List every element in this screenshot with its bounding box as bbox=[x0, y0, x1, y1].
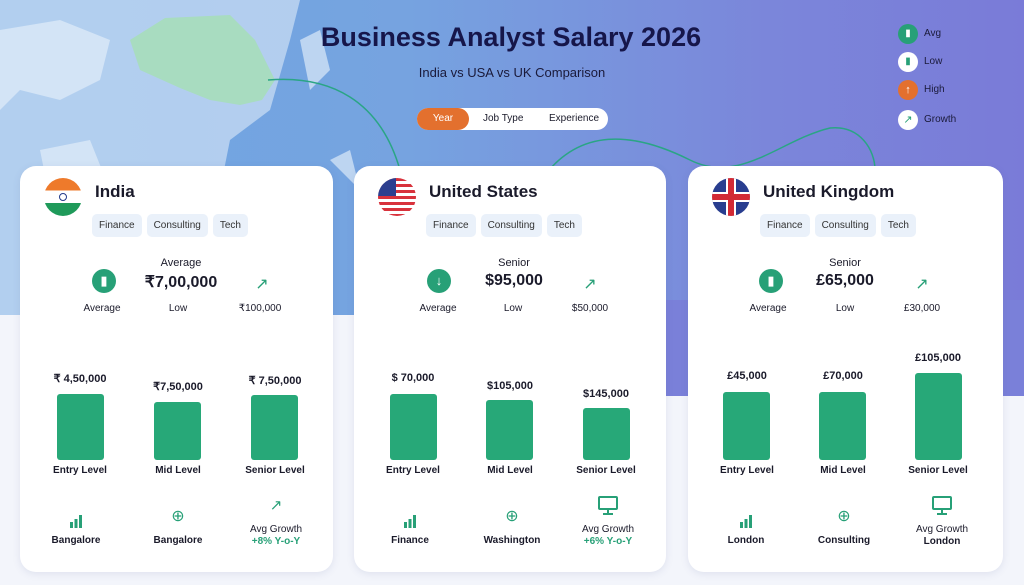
panel: United States: Average bbox=[419, 303, 457, 314]
panel: United Kingdom: Finance bbox=[767, 220, 803, 231]
panel: United States: Senior bbox=[498, 257, 530, 269]
icon: India flag bbox=[44, 178, 82, 216]
legend: ▮ bbox=[905, 28, 911, 39]
panel: India: Low bbox=[169, 303, 187, 314]
bar chart bbox=[386, 372, 636, 476]
panel: United States: Washington bbox=[484, 535, 540, 546]
panel: India: ⊕ bbox=[171, 508, 185, 525]
panel: United Kingdom: ▮ bbox=[767, 273, 775, 288]
tabs: Experience bbox=[549, 113, 599, 124]
panel: India: Bangalore bbox=[154, 535, 202, 546]
icon: bars bbox=[404, 515, 416, 528]
bar chart: ₹ 7,50,000 bbox=[249, 375, 301, 387]
panel: India: ₹100,000 bbox=[239, 303, 281, 314]
bar chart: Mid Level bbox=[820, 465, 866, 476]
bar chart: Senior Level bbox=[908, 465, 968, 476]
panel: India: Avg Growth bbox=[250, 524, 302, 535]
icon: monitor bbox=[932, 496, 952, 515]
bar chart: $105,000 bbox=[487, 380, 533, 392]
legend: ▮ bbox=[905, 56, 911, 67]
panel: India: Average bbox=[83, 303, 121, 314]
bar chart: Entry Level bbox=[386, 465, 440, 476]
panel: United States: ⊕ bbox=[505, 508, 519, 525]
panel: United Kingdom: Senior bbox=[829, 257, 861, 269]
panel: United Kingdom: London bbox=[728, 535, 764, 546]
bar chart: $145,000 bbox=[583, 388, 629, 400]
bar chart: Mid Level bbox=[155, 465, 201, 476]
connecting curve bbox=[552, 127, 876, 166]
panel: United States bbox=[354, 166, 666, 572]
panel: India: ▮ bbox=[100, 273, 108, 288]
legend bbox=[898, 24, 956, 130]
panel: United Kingdom: Tech bbox=[888, 220, 909, 231]
bar chart: Entry Level bbox=[53, 465, 107, 476]
panel: India: ↗ bbox=[255, 276, 269, 293]
panel: United States: $50,000 bbox=[572, 303, 608, 314]
panel: United Kingdom: £65,000 bbox=[816, 272, 874, 289]
legend: ↗ bbox=[903, 114, 913, 126]
panel: United Kingdom: Consulting bbox=[822, 220, 869, 231]
panel: United States: ↓ bbox=[436, 273, 442, 288]
panel: India: +8% Y-o-Y bbox=[252, 536, 300, 547]
icon: UK flag bbox=[712, 178, 750, 216]
bar chart: ₹ 4,50,000 bbox=[54, 373, 106, 385]
icon: US flag bbox=[378, 178, 416, 216]
panel: United States: $95,000 bbox=[485, 272, 543, 289]
panel: India: Average bbox=[161, 257, 201, 269]
panel: United States: Avg Growth bbox=[582, 524, 634, 535]
panel: India: Consulting bbox=[154, 220, 201, 231]
panel: United Kingdom: Average bbox=[749, 303, 787, 314]
panel: United Kingdom bbox=[688, 166, 1003, 572]
panel: United States: Finance bbox=[391, 535, 429, 546]
panel: United States: Consulting bbox=[488, 220, 535, 231]
bar chart: £70,000 bbox=[823, 370, 863, 382]
panel: United Kingdom: Avg Growth bbox=[916, 524, 968, 535]
bar chart: £105,000 bbox=[915, 352, 961, 364]
panel: United States: +6% Y-o-Y bbox=[584, 536, 632, 547]
bar chart: Senior Level bbox=[576, 465, 636, 476]
icon: bars bbox=[740, 515, 752, 528]
panel: United States: Finance bbox=[433, 220, 469, 231]
legend: High bbox=[924, 84, 945, 95]
panel: United Kingdom: London bbox=[924, 536, 960, 547]
panel: India: Tech bbox=[220, 220, 241, 231]
panel: India: Finance bbox=[99, 220, 135, 231]
icon: monitor bbox=[598, 496, 618, 515]
tabs: Year bbox=[433, 113, 453, 124]
panel: United States: Tech bbox=[554, 220, 575, 231]
panel: United Kingdom: Low bbox=[836, 303, 854, 314]
icon: bars bbox=[70, 515, 82, 528]
tabs bbox=[417, 108, 608, 130]
map background bbox=[0, 0, 400, 315]
panel: India bbox=[20, 166, 333, 572]
panel: India: Bangalore bbox=[52, 535, 100, 546]
legend: Growth bbox=[924, 114, 956, 125]
panel: United States: United States bbox=[429, 182, 538, 201]
panel: United Kingdom: ⊕ bbox=[837, 508, 851, 525]
panel: United Kingdom: ↗ bbox=[915, 276, 929, 293]
tabs: Job Type bbox=[483, 113, 523, 124]
bar chart: Entry Level bbox=[720, 465, 774, 476]
subtitle: India vs USA vs UK Comparison bbox=[419, 65, 605, 80]
panel: India: India bbox=[95, 182, 135, 201]
bar chart: ₹7,50,000 bbox=[153, 381, 203, 393]
bar chart bbox=[53, 373, 305, 476]
panel: United Kingdom: Consulting bbox=[818, 535, 870, 546]
bar chart: Senior Level bbox=[245, 465, 305, 476]
legend: Avg bbox=[924, 28, 941, 39]
panel: India: ↗ bbox=[270, 497, 282, 514]
bar chart: £45,000 bbox=[727, 370, 767, 382]
panel: United States: Low bbox=[504, 303, 522, 314]
bar chart: $ 70,000 bbox=[392, 372, 434, 384]
panel: United Kingdom: £30,000 bbox=[904, 303, 940, 314]
panel: United Kingdom: United Kingdom bbox=[763, 182, 894, 201]
panel: India: ₹7,00,000 bbox=[145, 274, 217, 291]
panel: United States: ↗ bbox=[583, 276, 597, 293]
bar chart bbox=[720, 352, 968, 476]
title: Business Analyst Salary 2026 bbox=[321, 22, 701, 52]
legend: Low bbox=[924, 56, 942, 67]
legend: ↑ bbox=[905, 84, 911, 96]
bar chart: Mid Level bbox=[487, 465, 533, 476]
